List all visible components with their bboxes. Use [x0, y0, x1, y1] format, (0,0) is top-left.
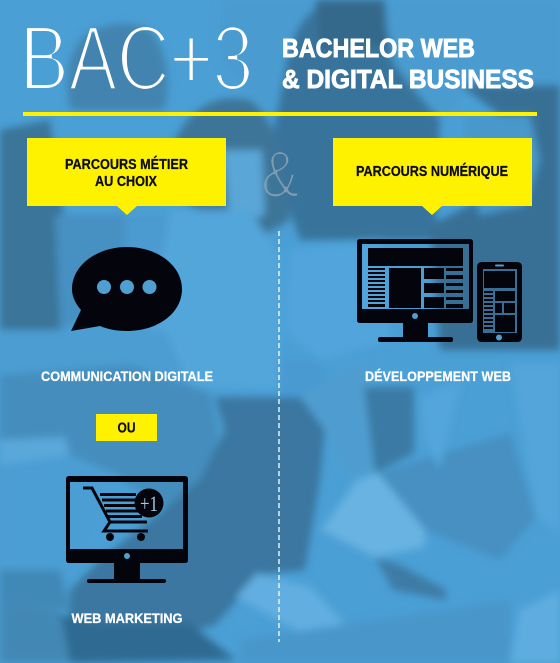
upper figures [67, 24, 168, 110]
callout: parcours métier au choix: PARCOURS MÉTIER [65, 156, 188, 173]
subtitle: Bachelor Web & Digital Business: & DIGITAL BUSINESS [282, 64, 534, 94]
phone [477, 262, 522, 342]
badge: ou [96, 414, 157, 441]
subtitle: Bachelor Web & Digital Business: BACHELOR WEB [282, 33, 475, 63]
subtitle: Bachelor Web & Digital Business [282, 33, 534, 94]
callout: parcours métier au choix: AU CHOIX [95, 174, 157, 190]
callout: parcours numérique: PARCOURS NUMÉRIQUE [356, 163, 508, 180]
label: communication digitale: COMMUNICATION DIGITALE [41, 368, 213, 384]
dark jeans [70, 397, 325, 650]
callout: parcours numérique [333, 138, 532, 215]
label: web marketing: WEB MARKETING [72, 610, 183, 626]
dashed centre divider [278, 231, 280, 642]
floor [240, 600, 510, 663]
icon: web marketing monitor with cart [66, 476, 188, 583]
centre laptop [279, 360, 330, 393]
icon: speech bubble [71, 247, 182, 331]
lower-left seated legs [0, 340, 218, 510]
callout: parcours métier au choix [27, 138, 226, 215]
icon: desktop and phone responsive layouts [357, 239, 522, 342]
desktop [357, 239, 473, 342]
cart: +1 [140, 491, 158, 516]
title: BAC+3: BAC+3 [20, 6, 253, 110]
badge: ou: OU [118, 420, 136, 436]
label: développement web: DÉVELOPPEMENT WEB [365, 368, 511, 384]
shoes [321, 473, 425, 557]
yellow header rule [23, 112, 537, 116]
ampersand: & [261, 137, 299, 211]
dark gap and right figure [364, 387, 414, 473]
